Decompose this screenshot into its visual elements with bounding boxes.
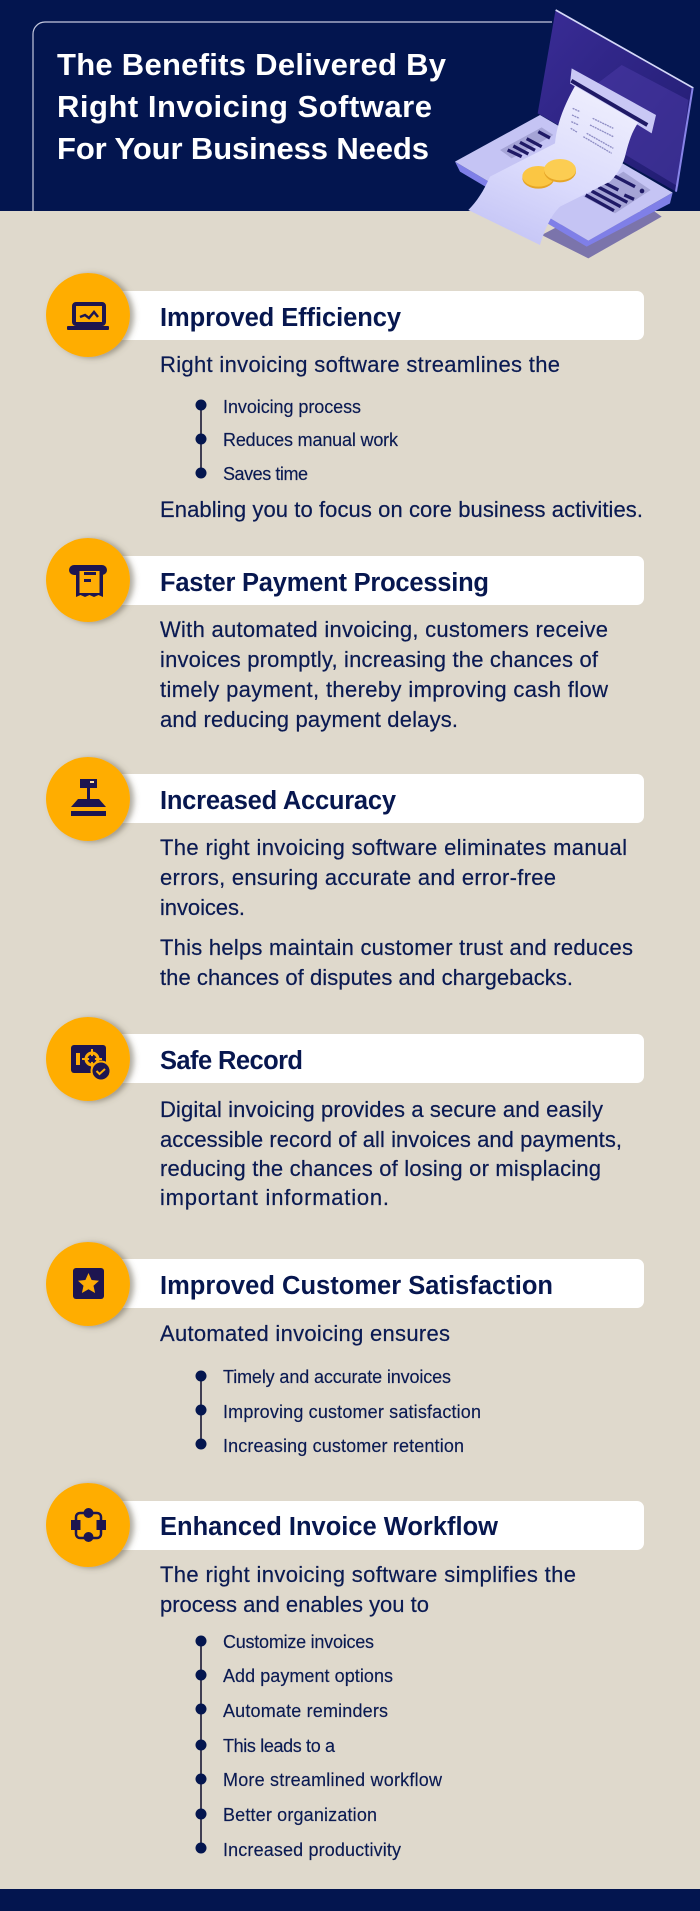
icon badge: receipt: [46, 538, 130, 622]
body text: The right invoicing software simplifies the: [160, 1562, 576, 1587]
body text: Digital invoicing provides a secure and easily: [160, 1097, 603, 1122]
illustration: laptop printing an invoice: [455, 9, 693, 258]
icon badge: star: [46, 1242, 130, 1326]
body text: [160, 1562, 576, 1617]
heading bar: Safe Record: [160, 1047, 303, 1075]
title frame: [33, 22, 552, 211]
body text: accessible record of all invoices and payments,: [160, 1127, 622, 1152]
header band: [0, 0, 700, 211]
bullet list: Improving customer satisfaction: [223, 1402, 481, 1422]
body text: The right invoicing software eliminates manual: [160, 835, 627, 860]
body text: timely payment, thereby improving cash flow: [160, 677, 608, 702]
panel: faster payment processing: [46, 538, 644, 732]
icon badge: laptop: [46, 273, 130, 357]
bullet list: This leads to a: [223, 1736, 336, 1756]
body text: Enabling you to focus on core business activities.: [160, 497, 643, 522]
panel: increased accuracy: [46, 757, 644, 990]
body text: reducing the chances of losing or misplacing: [160, 1156, 601, 1181]
body text: [160, 352, 643, 522]
bullet list: [196, 397, 399, 484]
footer band: [0, 1889, 700, 1911]
bullet list: Automate reminders: [223, 1701, 388, 1721]
bullet list: Reduces manual work: [223, 430, 399, 450]
panel: improved customer satisfaction: [46, 1242, 644, 1456]
title: [57, 47, 447, 166]
heading bar: Increased Accuracy: [160, 787, 397, 815]
heading bar: [110, 291, 644, 340]
bullet list: Increasing customer retention: [223, 1436, 464, 1456]
body text: invoices promptly, increasing the chances of: [160, 647, 599, 672]
title: For Your Business Needs: [57, 131, 429, 166]
body text: process and enables you to: [160, 1592, 429, 1617]
panel: enhanced invoice workflow: [46, 1483, 644, 1860]
bullet list: Add payment options: [223, 1666, 393, 1686]
body text: [160, 835, 633, 990]
body text: and reducing payment delays.: [160, 707, 458, 732]
body text: important information.: [160, 1185, 389, 1210]
body text: errors, ensuring accurate and error-free: [160, 865, 556, 890]
bullet list: Timely and accurate invoices: [223, 1367, 451, 1387]
body text: invoices.: [160, 895, 245, 920]
icon badge: cash register: [46, 757, 130, 841]
heading bar: Faster Payment Processing: [160, 569, 489, 597]
bullet list: Saves time: [223, 464, 308, 484]
bullet list: Increased productivity: [223, 1840, 401, 1860]
heading bar: [110, 556, 644, 605]
bullet list: Better organization: [223, 1805, 377, 1825]
bullet list: Invoicing process: [223, 397, 361, 417]
heading bar: [110, 774, 644, 823]
bullet list: More streamlined workflow: [223, 1770, 443, 1790]
bullet list: [196, 1367, 481, 1456]
body text: This helps maintain customer trust and reduces: [160, 935, 633, 960]
body text: the chances of disputes and chargebacks.: [160, 965, 573, 990]
heading bar: [110, 1259, 644, 1308]
panel: improved efficiency: [46, 273, 644, 522]
body text: [160, 1097, 622, 1210]
heading bar: Improved Customer Satisfaction: [160, 1272, 553, 1300]
heading bar: Improved Efficiency: [160, 304, 402, 332]
body text: [160, 617, 608, 732]
bullet list: [196, 1632, 443, 1860]
body text: Automated invoicing ensures: [160, 1321, 450, 1346]
heading bar: [110, 1501, 644, 1550]
body text: With automated invoicing, customers receive: [160, 617, 608, 642]
title: The Benefits Delivered By: [57, 47, 447, 82]
heading bar: Enhanced Invoice Workflow: [160, 1513, 498, 1541]
bullet list: Customize invoices: [223, 1632, 374, 1652]
panel: safe record: [46, 1017, 644, 1210]
heading bar: [110, 1034, 644, 1083]
title: Right Invoicing Software: [57, 89, 432, 124]
icon badge: workflow: [46, 1483, 130, 1567]
icon badge: safe with check: [46, 1017, 130, 1101]
body text: Right invoicing software streamlines the: [160, 352, 560, 377]
